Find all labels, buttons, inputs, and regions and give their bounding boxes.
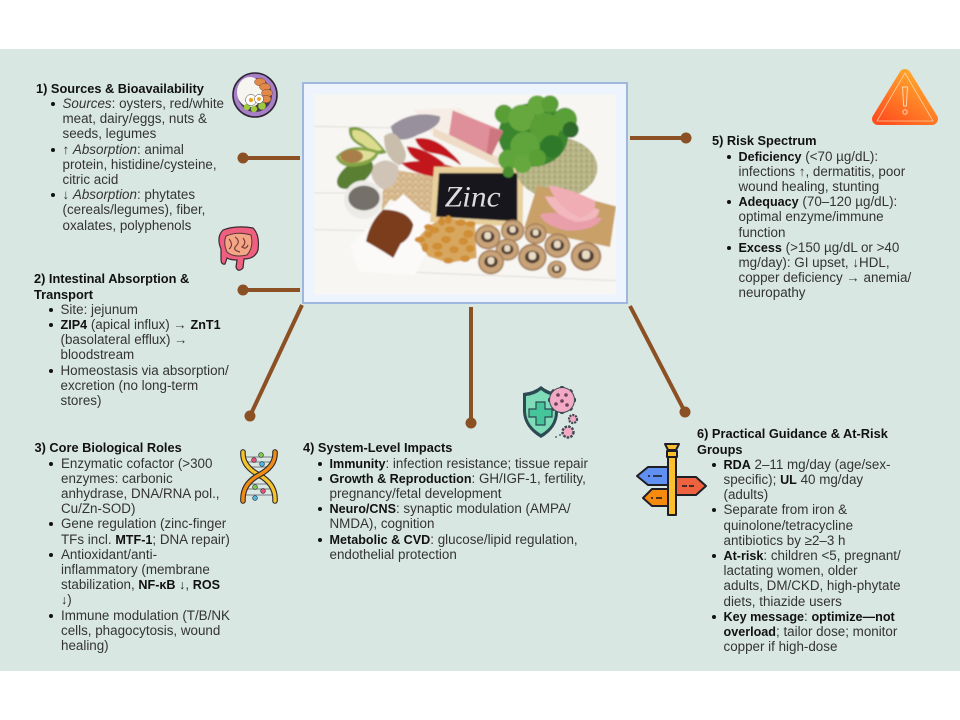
site bullet: Site: jejunum: [60, 302, 138, 317]
separation bullet: antibiotics by ≥2–3 h: [724, 533, 846, 548]
key message bullet: overload; tailor dose; monitor: [724, 624, 897, 639]
decreased absorption bullet: (cereals/legumes), fiber,: [62, 202, 205, 217]
growth bullet: Growth & Reproduction: GH/IGF-1, fertility,: [330, 471, 586, 486]
chili: [401, 138, 466, 177]
RDA bullet: RDA 2–11 mg/day (age/sex-: [724, 457, 890, 472]
separation bullet: Separate from iron &: [724, 502, 847, 517]
central image frame with zinc-rich foods: [302, 82, 628, 304]
icon: DNA helix: [240, 449, 278, 504]
icon: signpost: [636, 443, 707, 516]
sources bullet: [36, 96, 236, 142]
excess bullet: copper deficiency → anemia/: [738, 270, 911, 285]
adequacy bullet: Adequacy (70–120 µg/dL):: [738, 194, 897, 209]
heading 6: 6) Practical Guidance & At-Risk: [697, 426, 888, 441]
deficiency bullet: Deficiency (<70 µg/dL):: [738, 149, 878, 164]
excess bullet: [712, 240, 917, 301]
board and ham: [524, 185, 616, 247]
sources bullet: Sources: oysters, red/white: [62, 96, 224, 111]
paper and tray under meat: [414, 108, 502, 156]
grains: [516, 137, 597, 199]
enzymatic cofactor bullet: Cu/Zn-SOD): [61, 501, 135, 516]
oysters: [391, 114, 440, 140]
deficiency bullet: infections ↑, dermatitis, poor: [738, 164, 905, 179]
panel 3: core biological roles: [34, 440, 230, 653]
key message bullet: copper if high-dose: [724, 639, 837, 654]
neuro bullet: Neuro/CNS: synaptic modulation (AMPA/: [330, 501, 571, 516]
heading 2: [34, 271, 189, 302]
heading 6: [697, 426, 888, 457]
transporters bullet: [34, 317, 239, 363]
growth bullet: [303, 471, 598, 501]
heading 1: 1) Sources & Bioavailability: [36, 81, 204, 96]
homeostasis bullet: excretion (no long-term: [60, 378, 198, 393]
mushrooms: [475, 225, 501, 249]
enzymatic cofactor bullet: Enzymatic cofactor (>300: [61, 456, 212, 471]
neuro bullet: [303, 501, 598, 532]
icon: shield and virus: [523, 386, 578, 439]
increased absorption bullet: ↑ Absorption: animal: [62, 142, 184, 156]
chalk sign: [430, 167, 523, 227]
gene regulation bullet: [34, 516, 234, 547]
decreased absorption bullet: oxalates, polyphenols: [62, 218, 191, 233]
at-risk bullet: [697, 548, 902, 609]
heading 4: 4) System-Level Impacts: [303, 440, 452, 455]
immune modulation bullet: healing): [61, 638, 109, 653]
gene regulation bullet: Gene regulation (zinc-finger: [61, 516, 226, 531]
panel 6: practical guidance and at-risk groups: [697, 426, 901, 654]
immunity bullet: Immunity: infection resistance; tissue repair: [330, 456, 588, 471]
greens: [495, 95, 579, 178]
homeostasis bullet: stores): [60, 393, 101, 408]
antioxidant bullet: Antioxidant/anti-: [61, 547, 157, 562]
increased absorption bullet: protein, histidine/cysteine,: [62, 157, 217, 172]
deficiency bullet: [712, 149, 917, 194]
metabolic bullet: endothelial protection: [330, 547, 457, 562]
heading 3: 3) Core Biological Roles: [34, 440, 182, 455]
transporters bullet: bloodstream: [60, 347, 134, 362]
panel 1: sources and bioavailability: [36, 81, 224, 233]
gene regulation bullet: TFs incl. MTF-1; DNA repair): [61, 532, 230, 547]
at-risk bullet: lactating women, older: [724, 563, 857, 578]
neuro bullet: NMDA), cognition: [330, 516, 434, 531]
heading 5: 5) Risk Spectrum: [712, 133, 817, 148]
icon: intestine: [218, 226, 260, 271]
antioxidant bullet: inflammatory (membrane: [61, 562, 210, 577]
panel 5: risk spectrum: [712, 133, 912, 300]
antioxidant bullet: stabilization, NF-κB ↓, ROS: [61, 577, 220, 592]
paper under powder: [364, 194, 421, 274]
adequacy bullet: optimal enzyme/immune: [738, 209, 884, 224]
avocado: [349, 127, 387, 154]
growth bullet: pregnancy/fetal development: [330, 486, 501, 501]
sources bullet: meat, dairy/eggs, nuts &: [62, 111, 207, 126]
transporters bullet: ZIP4 (apical influx) → ZnT1: [60, 317, 221, 332]
key message bullet: Key message: optimize—not: [724, 609, 895, 624]
RDA bullet: (adults): [724, 487, 768, 502]
enzymatic cofactor bullet: anhydrase, DNA/RNA pol.,: [61, 486, 220, 501]
immune modulation bullet: Immune modulation (T/B/NK: [61, 608, 230, 623]
RDA bullet: [697, 457, 902, 502]
heading 2: Transport: [34, 287, 93, 302]
sources bullet: seeds, legumes: [62, 126, 156, 141]
antioxidant bullet: [34, 547, 234, 608]
at-risk bullet: adults, DM/CKD, high-phytate: [724, 578, 901, 593]
almonds: [417, 218, 477, 263]
metabolic bullet: Metabolic & CVD: glucose/lipid regulation,: [330, 532, 578, 547]
key message bullet: [697, 609, 902, 654]
separation bullet: quinolone/tetracycline: [724, 518, 853, 533]
heading 2: 2) Intestinal Absorption &: [34, 271, 189, 286]
deficiency bullet: wound healing, stunting: [738, 179, 879, 194]
heading 6: Groups: [697, 442, 743, 457]
pork loin: [449, 110, 503, 155]
chickpeas: [382, 170, 435, 215]
decreased absorption bullet: [36, 187, 236, 233]
metabolic bullet: [303, 532, 598, 562]
chia bowl: [344, 180, 383, 219]
enzymatic cofactor bullet: [34, 456, 234, 516]
homeostasis bullet: [34, 363, 239, 408]
increased absorption bullet: [36, 142, 236, 187]
chalk word: Zinc: [445, 182, 501, 214]
excess bullet: neuropathy: [738, 285, 806, 300]
antioxidant bullet: ↓): [61, 592, 72, 607]
panel 4: system-level impacts: [303, 440, 588, 562]
immune modulation bullet: [34, 608, 234, 653]
transporters bullet: (basolateral efflux) →: [60, 332, 188, 347]
food photo illustration: [314, 94, 616, 294]
immune modulation bullet: cells, phagocytosis, wound: [61, 623, 220, 638]
excess bullet: Excess (>150 µg/dL or >40: [738, 240, 899, 255]
at-risk bullet: diets, thiazide users: [724, 594, 842, 609]
cocoa powder: [366, 210, 413, 258]
RDA bullet: specific); UL 40 mg/day: [724, 472, 863, 487]
at-risk bullet: At-risk: children <5, pregnant/: [724, 548, 901, 563]
increased absorption bullet: citric acid: [62, 172, 118, 187]
icon: warning triangle: [872, 69, 938, 125]
adequacy bullet: [712, 194, 917, 240]
homeostasis bullet: Homeostasis via absorption/: [60, 363, 229, 378]
separation bullet: [697, 502, 902, 548]
adequacy bullet: function: [738, 225, 785, 240]
excess bullet: mg/day): GI upset, ↓HDL,: [738, 255, 890, 270]
panel 2: intestinal absorption and transport: [34, 271, 229, 408]
enzymatic cofactor bullet: enzymes: carbonic: [61, 471, 173, 486]
decreased absorption bullet: ↓ Absorption: phytates: [62, 187, 195, 202]
icon: food bowl: [232, 72, 278, 118]
